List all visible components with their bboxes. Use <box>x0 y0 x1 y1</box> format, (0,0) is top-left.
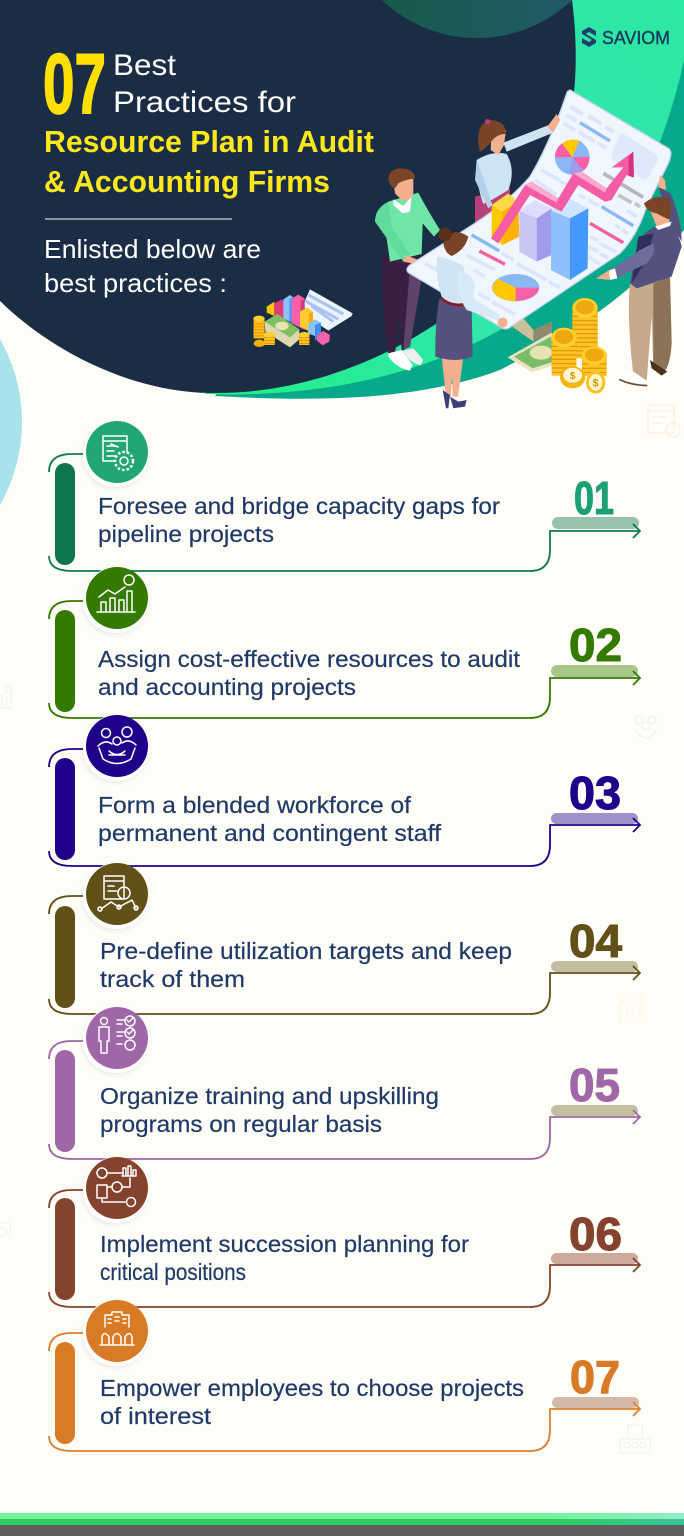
bar 2 <box>55 610 75 712</box>
text 3: Form a blended workforce of <box>98 792 412 818</box>
step 7 <box>49 1300 640 1451</box>
step 1 <box>49 421 640 571</box>
document sheet <box>407 90 671 329</box>
connector 7 <box>49 1333 640 1451</box>
watermark icon: growth <box>0 686 12 708</box>
connector 1 <box>49 454 640 571</box>
text 6 <box>100 1231 469 1285</box>
bar 4 <box>55 906 75 1008</box>
watermark icon: checklist <box>620 994 644 1020</box>
bar 3 <box>55 758 75 860</box>
title: Best <box>113 49 177 82</box>
number 3: 03 <box>569 767 621 819</box>
step 5 <box>49 1007 640 1159</box>
text 1: Foresee and bridge capacity gaps for <box>98 493 500 519</box>
pill 2 <box>551 665 638 677</box>
text 3 <box>98 792 442 846</box>
icon 7 <box>83 1300 149 1366</box>
title: Practices for <box>113 86 296 119</box>
3D bars <box>492 193 588 280</box>
pill 7 <box>552 1397 639 1408</box>
text 2: and accounting projects <box>98 674 356 700</box>
text 3: permanent and contingent staff <box>98 820 442 846</box>
step 6 <box>49 1157 640 1307</box>
icon 5 <box>83 1007 149 1073</box>
text 4 <box>100 938 512 992</box>
person: man on right <box>596 175 682 386</box>
paper support and banknote <box>508 318 560 372</box>
text 4: Pre-define utilization targets and keep <box>100 938 512 964</box>
title <box>43 37 374 199</box>
connector 5 <box>49 1041 640 1159</box>
pill 6 <box>551 1253 638 1264</box>
text 6: critical positions <box>100 1259 246 1285</box>
step 3 <box>49 715 640 866</box>
step 4 <box>49 863 640 1014</box>
footer bands <box>0 1513 684 1536</box>
text 1 <box>98 493 500 547</box>
watermark icon: process <box>0 1219 10 1236</box>
subtitle <box>44 234 261 298</box>
text 5 <box>100 1083 439 1137</box>
small finance illustration <box>253 289 353 347</box>
watermark icon: building <box>620 1425 650 1453</box>
person: woman at back <box>475 119 553 227</box>
text 1: pipeline projects <box>98 521 274 547</box>
text 5: programs on regular basis <box>100 1111 382 1137</box>
text 7: of interest <box>100 1403 212 1429</box>
connector 4 <box>49 896 640 1014</box>
hand of woman at back <box>547 114 560 133</box>
bar 7 <box>55 1342 75 1444</box>
number 6: 06 <box>569 1208 622 1260</box>
light blue side circle <box>0 255 22 589</box>
person: woman in front <box>435 228 508 408</box>
icon 4 <box>83 863 149 929</box>
icon 3 <box>83 715 149 781</box>
title: Resource Plan in Audit <box>44 124 374 159</box>
pill 4 <box>551 961 638 972</box>
connector 3 <box>49 749 640 866</box>
number 7: 07 <box>570 1351 620 1403</box>
text 6: Implement succession planning for <box>100 1231 469 1257</box>
number 1: 01 <box>574 472 614 524</box>
subtitle: best practices : <box>44 268 227 298</box>
coins: $ <box>570 371 576 382</box>
pill 1 <box>552 517 639 529</box>
bar 5 <box>55 1050 75 1152</box>
team illustration <box>375 90 682 408</box>
pill 3 <box>551 813 638 824</box>
title: 07 <box>43 37 106 132</box>
icon 2 <box>83 567 149 633</box>
text 4: track of them <box>100 966 245 992</box>
bar 6 <box>55 1198 75 1300</box>
logo: SAVIOM <box>602 28 670 48</box>
number 4: 04 <box>569 915 622 967</box>
coins <box>551 298 607 394</box>
connector 6 <box>49 1190 640 1307</box>
text 5: Organize training and upskilling <box>100 1083 439 1109</box>
icon 1 <box>83 421 149 487</box>
step 2 <box>49 567 640 718</box>
pill 5 <box>551 1105 638 1116</box>
text 2: Assign cost-effective resources to audit <box>98 646 521 672</box>
subtitle: Enlisted below are <box>44 234 261 264</box>
text 2 <box>98 646 521 700</box>
person: man in green sweater <box>375 168 440 371</box>
pie chart bottom <box>492 274 539 301</box>
watermark icon: team <box>635 716 657 738</box>
bar 1 <box>55 463 75 565</box>
text 7 <box>100 1375 524 1429</box>
coins: $ <box>593 377 599 389</box>
growth arrow <box>491 152 634 243</box>
watermark icon: report <box>648 405 680 437</box>
number 2: 02 <box>569 619 622 671</box>
header shapes <box>0 0 684 399</box>
pie chart top <box>555 139 590 175</box>
number 5: 05 <box>569 1059 620 1111</box>
connector 2 <box>49 601 640 718</box>
text 7: Empower employees to choose projects <box>100 1375 524 1401</box>
title: & Accounting Firms <box>44 164 330 199</box>
icon 6 <box>83 1157 149 1223</box>
